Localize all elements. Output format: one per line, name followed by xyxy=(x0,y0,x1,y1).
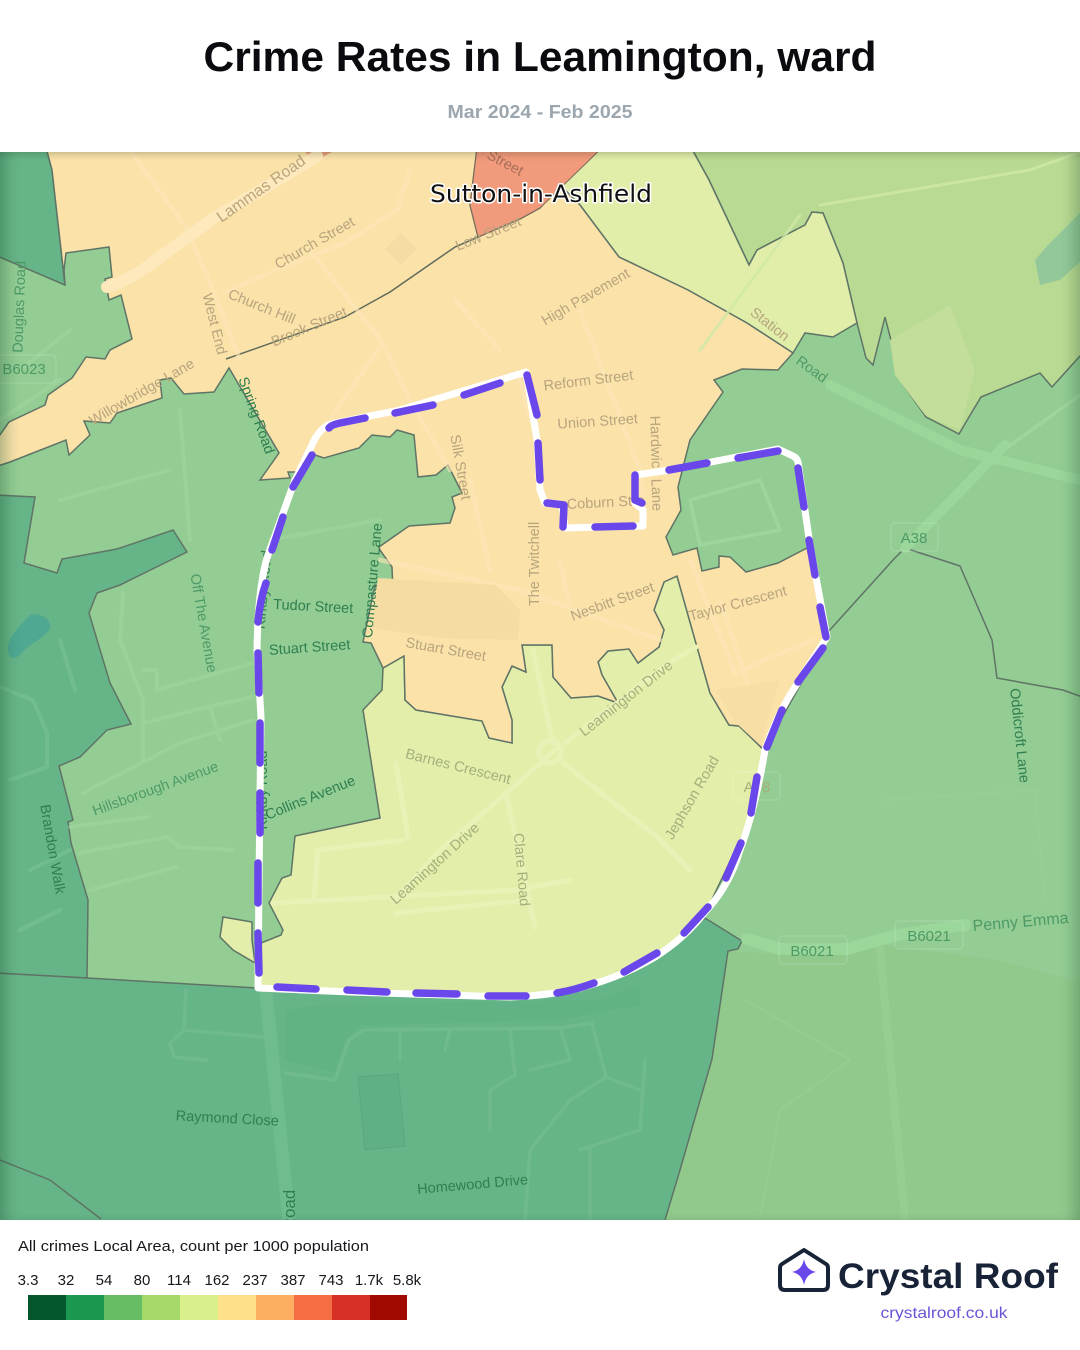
road labels: Stuart Street xyxy=(269,637,351,659)
legend labels xyxy=(18,1272,422,1289)
subtitle: Mar 2024 - Feb 2025 xyxy=(448,102,632,122)
road labels: B6023 xyxy=(2,361,46,378)
region: top-left dark green xyxy=(0,140,65,285)
region: small red-orange corner xyxy=(305,152,332,161)
legend labels: 32 xyxy=(58,1272,74,1289)
road labels: The Twitchell xyxy=(527,522,543,606)
road labels: Willowbridge Lane xyxy=(87,356,197,429)
road labels: Raymond Close xyxy=(175,1108,279,1130)
road labels: Low Street xyxy=(453,214,524,255)
legend colour scale xyxy=(28,1295,407,1320)
legend labels: 3.3 xyxy=(18,1272,38,1289)
road labels: Nesbitt Street xyxy=(569,580,657,625)
road labels: Spring Road xyxy=(234,375,277,456)
road labels: Kirkby Road xyxy=(253,550,275,630)
region: south-east green xyxy=(662,945,1080,1230)
road labels: Leamington Drive xyxy=(388,820,483,908)
road labels: Lane xyxy=(647,478,665,511)
road labels: Tudor Street xyxy=(273,597,354,617)
ward boundary: white base xyxy=(257,372,827,997)
road labels: A38 xyxy=(744,779,770,796)
road labels: Reform Street xyxy=(543,368,634,394)
logo wordmark: Crystal Roof xyxy=(838,1257,1058,1296)
legend labels: 387 xyxy=(280,1272,306,1289)
region: top-right light green xyxy=(687,140,1080,434)
road labels: Off The Avenue xyxy=(186,573,219,674)
map edge shading xyxy=(0,152,1080,1220)
boundary line: east xyxy=(828,548,1080,698)
road labels xyxy=(2,147,1069,1230)
boundary line: south-west xyxy=(0,1158,101,1219)
road labels: Taylor Crescent xyxy=(687,583,789,625)
road labels: High Pavement xyxy=(539,266,633,329)
road labels: Stuart Street xyxy=(404,635,487,665)
road labels: Homewood Drive xyxy=(417,1172,529,1198)
road labels: Road xyxy=(793,353,830,386)
road labels: Barnes Crescent xyxy=(404,746,512,788)
land-use patches xyxy=(285,233,975,1150)
region: ward south yellow-green xyxy=(256,576,764,997)
region: north yellow-green xyxy=(560,140,857,353)
road labels: Jephson Road xyxy=(662,754,723,842)
road labels: B6021 xyxy=(907,928,951,945)
road labels: Brandon Walk xyxy=(36,803,68,896)
road labels: A38 xyxy=(901,530,927,547)
road labels: Church Street xyxy=(272,214,358,273)
legend labels: 114 xyxy=(167,1272,191,1289)
road labels: Lammas Road xyxy=(214,153,309,226)
ward boundary: purple dashes xyxy=(258,375,826,996)
road network xyxy=(0,152,1080,1220)
place label: Sutton-in-Ashfield xyxy=(430,180,652,208)
road labels: Clare Road xyxy=(510,832,532,907)
road labels: Compasture Lane xyxy=(360,523,386,639)
road labels: Oddicroft Lane xyxy=(1006,687,1032,784)
boundary line: brook street xyxy=(226,237,478,359)
road labels: Hardwic xyxy=(646,415,664,468)
region: red-orange town centre xyxy=(470,140,610,237)
road shields xyxy=(0,355,963,964)
pond north-east xyxy=(1035,213,1080,285)
legend labels: 162 xyxy=(204,1272,230,1289)
title: Crime Rates in Leamington, ward xyxy=(204,33,876,80)
legend labels: 743 xyxy=(318,1272,344,1289)
pond west xyxy=(8,614,50,658)
road labels: Kirkby Road xyxy=(255,751,271,829)
road labels: West End xyxy=(199,292,229,356)
region: west dark green xyxy=(0,495,187,978)
road labels: Brook Street xyxy=(269,304,350,350)
legend labels: 54 xyxy=(96,1272,112,1289)
road labels: Church Hill xyxy=(226,287,297,328)
legend labels: 1.7k xyxy=(355,1272,384,1289)
road labels: Douglas Road xyxy=(10,261,30,353)
region: small yellow-green pocket xyxy=(220,917,255,963)
road labels: Collins Avenue xyxy=(263,773,358,824)
legend labels: 237 xyxy=(242,1272,268,1289)
road labels: Station xyxy=(747,305,792,345)
region: central cream xyxy=(0,140,827,750)
region: south dark green xyxy=(0,918,742,1230)
road labels: Union Street xyxy=(557,411,638,433)
road labels: Leamington Drive xyxy=(577,658,676,740)
road labels: Coburn Stre xyxy=(566,493,645,513)
legend labels: 5.8k xyxy=(393,1272,422,1289)
legend labels: 80 xyxy=(134,1272,150,1289)
website link: crystalroof.co.uk xyxy=(880,1305,1009,1322)
map xyxy=(0,152,1080,1220)
logo icon: house with star xyxy=(780,1250,828,1290)
road labels: B6021 xyxy=(790,943,834,960)
road labels: Penny Emma xyxy=(972,910,1069,935)
legend title: All crimes Local Area, count per 1000 population xyxy=(18,1238,369,1255)
road labels: Silk Street xyxy=(446,433,474,501)
road labels: Hillsborough Avenue xyxy=(91,759,221,819)
